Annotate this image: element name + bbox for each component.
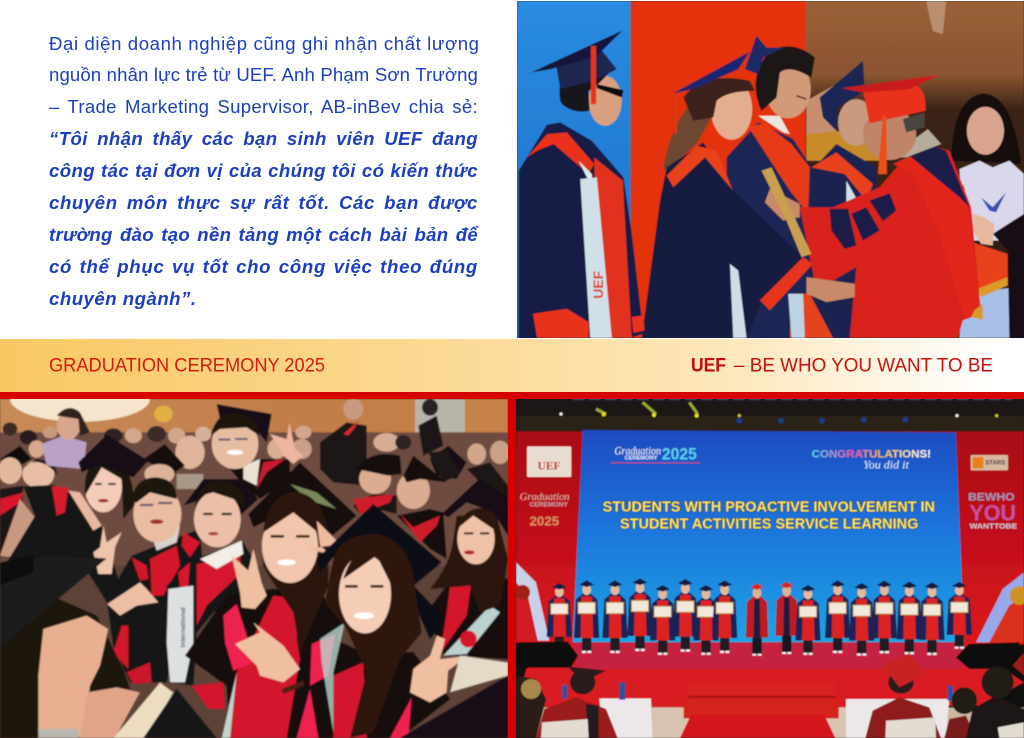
graduate: top middle boy [211,404,303,499]
figure: student boy [727,36,833,338]
text block: quote from AB-inBev representative: Đại diện doanh nghiệp cũng ghi nhận chất lượng [49,33,480,54]
screen logo: graduation ceremony 2025: 2025 [662,444,697,463]
photo: professor handing diploma to graduates on stage [517,1,1024,338]
left side panel logos: 2025 [530,514,560,529]
figure: student girl [642,52,813,338]
right side panel logos: STARS [985,461,1005,467]
text block: quote from AB-inBev representative [49,33,480,309]
graduate: boy centre with sash: International [180,607,187,647]
stage red back wall [516,431,1024,645]
graduate: boy with glasses right [397,451,460,559]
graduate: boy centre with sash [167,479,258,686]
standing graduates back right [320,398,443,486]
right side panel logos: BEWHO [968,492,1015,504]
band slogan: UEF be who you want to be: UEF [691,356,726,376]
figure: back student [811,61,876,338]
graduate: boy with glasses centre [107,477,203,684]
audience: right table and seated officials [846,652,1024,738]
text block: quote from AB-inBev representative: chuyên môn thực sự rất tốt. Các bạn được [49,192,478,213]
floor and steps [516,682,1024,738]
screen logo: graduation ceremony 2025: Graduation [614,443,661,457]
stage side arches [515,562,1024,642]
text block: quote from AB-inBev representative: chuyên ngành”. [49,288,196,309]
photo: award ceremony on stage with blue LED screen [516,399,1024,738]
left side panel logos: UEF [538,461,560,473]
text block: quote from AB-inBev representative: – Trade Marketing Supervisor, AB-inBev chia sẻ: [49,96,478,117]
stage speakers [516,642,1019,669]
screen heading: congratulations [812,448,931,471]
audience: left table and seated official [516,666,653,738]
left side panel logos: Graduation [520,492,570,503]
photo: smiling graduates in the hall making peace signs [0,399,508,738]
banner band: gold gradient strip [0,339,1024,392]
standing girl in purple shirt [42,408,90,469]
graduate: smiling girl front [297,504,468,738]
text block: quote from AB-inBev representative: “Tôi nhận thấy các bạn sinh viên UEF đang [49,128,478,149]
text block: quote from AB-inBev representative: có thể phục vụ tốt cho công việc theo đúng [49,256,478,277]
background crowd [0,422,510,559]
stage floor [516,642,1024,707]
graduate: boy behind right [353,454,402,514]
graduate: smiling girl centre [185,462,357,738]
band caption: graduation ceremony 2025: GRADUATION CEREMONY 2025 [49,356,325,376]
band slogan: UEF be who you want to be: – BE WHO YOU WANT TO BE [734,356,993,376]
graduates row holding certificates [547,578,972,656]
figure: left student with UEF sash: UEF [590,270,606,299]
screen heading: congratulations: CONGRATULATIONS! [812,448,931,460]
graduate: left girl [23,435,148,612]
right side panel logos: YOU [969,500,1016,525]
left side panel logos: CEREMONY [529,501,568,508]
screen heading: congratulations: You did it [863,457,909,471]
right side panel logos: WANTTOBE [970,521,1017,530]
figure: left student with UEF sash [519,30,645,338]
figure: woman in ao dai at right [951,93,1024,338]
screen title: award name: STUDENTS WITH PROACTIVE INVOLVEMENT IN [603,500,935,516]
text block: quote from AB-inBev representative: trường đào tạo nền tảng một cách bài bản để [49,224,478,245]
screen logo: graduation ceremony 2025: CEREMONY [625,455,658,461]
text block: quote from AB-inBev representative: nguồn nhân lực trẻ từ UEF. Anh Phạm Sơn Trường [49,64,478,85]
red background bar and divider [0,392,1024,738]
foreground graduate adjusting cap [0,502,508,738]
figure: professor in red gown [762,75,983,338]
screen title: award name: STUDENT ACTIVITIES SERVICE LEARNING [620,516,918,532]
left side panel logos [520,446,571,529]
graduate: right girl [427,478,508,659]
LED screen [573,430,964,642]
screen logo: graduation ceremony 2025 [611,443,700,463]
right side panel logos [968,455,1017,530]
text block: quote from AB-inBev representative: công tác tại đơn vị của chúng tôi có kiến thức [49,160,478,181]
screen title: award name [603,500,935,532]
